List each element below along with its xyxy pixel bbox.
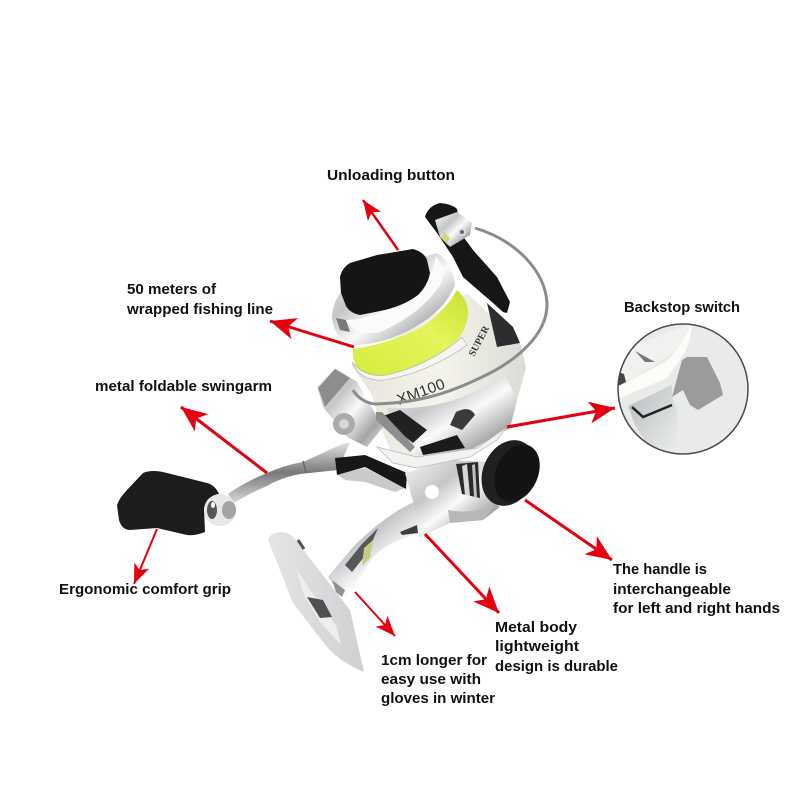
spool cylinder and rotor: XM100 xyxy=(395,376,447,409)
label: comfort grip: Ergonomic comfort grip xyxy=(59,581,231,598)
stem of the reel body xyxy=(328,500,450,597)
bail arm block xyxy=(317,368,415,452)
label: backstop switch: Backstop switch xyxy=(624,299,740,316)
label: metal body: Metal body xyxy=(495,619,578,636)
label: interchangeable handle: The handle is xyxy=(613,561,707,578)
label: metal body xyxy=(495,619,618,675)
spool cylinder and rotor xyxy=(352,293,526,468)
fishing line yellow spool xyxy=(353,290,468,377)
foot plate xyxy=(268,532,364,672)
backstop detail circle xyxy=(618,324,748,456)
label: unloading button: Unloading button xyxy=(327,167,455,184)
label: longer foot: gloves in winter xyxy=(381,690,495,707)
interchangeable handle knob xyxy=(471,431,548,515)
spool cylinder and rotor: SUPER xyxy=(467,324,492,358)
label: longer foot: 1cm longer for xyxy=(381,652,487,669)
spool black drag cap xyxy=(340,249,430,315)
infographic canvas xyxy=(60,169,780,706)
handle ball joint xyxy=(204,494,236,526)
arrow: backstop switch xyxy=(507,408,615,427)
arrow: swingarm xyxy=(181,407,267,473)
reel body housing xyxy=(405,460,500,536)
label: metal body: design is durable xyxy=(495,658,618,675)
spool skirt chrome xyxy=(332,253,455,345)
label: longer foot: easy use with xyxy=(381,671,481,688)
label: metal body: lightweight xyxy=(495,638,579,655)
label: longer foot xyxy=(381,652,495,707)
label: interchangeable handle xyxy=(613,561,780,617)
arrow: metal body xyxy=(425,534,499,613)
label: wrapped fishing line xyxy=(126,281,273,318)
label: wrapped fishing line: wrapped fishing line xyxy=(126,301,273,318)
label: swingarm: metal foldable swingarm xyxy=(95,378,272,395)
line roller xyxy=(435,212,472,247)
label: wrapped fishing line: 50 meters of xyxy=(127,281,217,298)
spool lower rim xyxy=(352,337,467,380)
arrow: longer foot xyxy=(355,592,395,636)
arrow: wrapped fishing line xyxy=(270,321,354,347)
arrow: comfort grip xyxy=(134,529,157,584)
fishing reel illustration xyxy=(117,203,548,672)
black bail arm xyxy=(425,203,510,313)
arrow: interchangeable handle xyxy=(525,500,612,560)
arrow: unloading button xyxy=(363,200,398,250)
black inner arm xyxy=(335,455,407,492)
bail wire xyxy=(353,228,547,404)
swing arm xyxy=(228,442,350,503)
label: interchangeable handle: for left and right hands xyxy=(613,600,780,617)
label: interchangeable handle: interchangeable xyxy=(613,581,731,598)
handle grip xyxy=(117,471,219,535)
